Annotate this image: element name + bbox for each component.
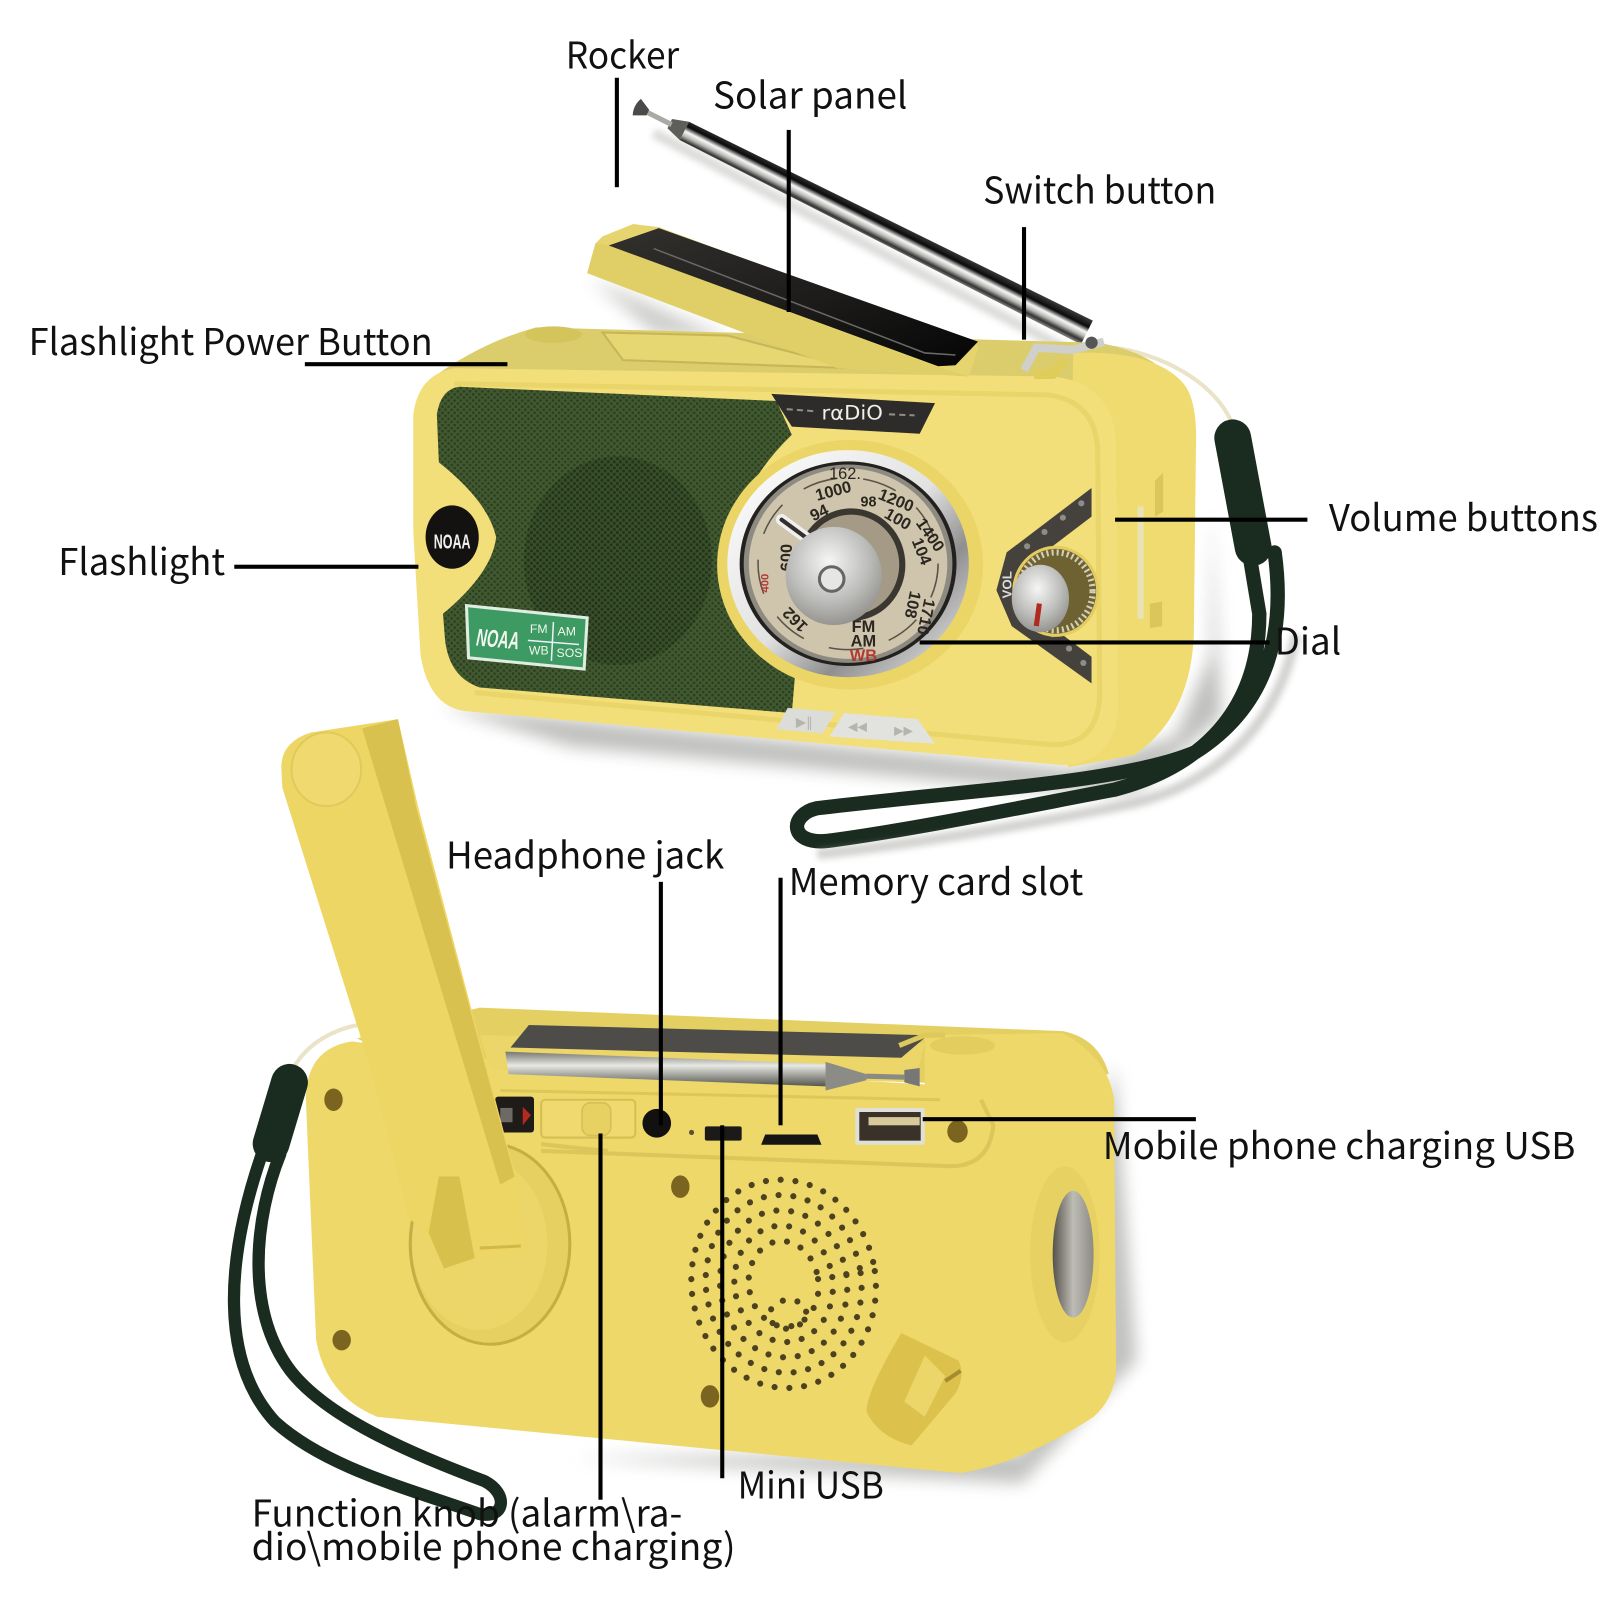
label: Solar panel: Solar panel	[713, 65, 907, 119]
dial numbers: 94	[807, 501, 832, 525]
dial numbers: 1710	[913, 597, 938, 637]
back shadow	[572, 1064, 1137, 1483]
label: Headphone jack	[446, 826, 724, 1125]
dial numbers: WB	[850, 647, 877, 665]
side slots	[1150, 473, 1163, 628]
dial scale arcs	[758, 478, 938, 650]
crank storage recess	[866, 1333, 962, 1446]
radio: front view	[413, 94, 1296, 854]
label: Headphone jack: Headphone jack	[446, 826, 724, 880]
speaker dark circle	[524, 456, 712, 665]
label: Mini USB: Mini USB	[738, 1456, 884, 1510]
back body top	[357, 1008, 1109, 1084]
dial inner chrome	[744, 464, 952, 663]
led pinhole	[689, 1130, 694, 1135]
label: Solar panel	[713, 65, 907, 312]
pointer	[782, 520, 812, 542]
dial inner dark edge	[740, 461, 957, 666]
dial numbers: 162.	[829, 465, 861, 483]
volume chevron plate	[996, 488, 1092, 683]
label: Rocker: Rocker	[566, 26, 680, 80]
antenna	[629, 94, 1093, 344]
lid edge	[899, 1035, 945, 1046]
raised frame	[454, 384, 1100, 745]
top surface	[429, 327, 1175, 384]
solar panel lid	[587, 224, 979, 376]
label: Memory card slot: Memory card slot	[789, 852, 1083, 906]
function indicator	[495, 1097, 534, 1132]
label: Mobile phone charging USB: Mobile phone charging USB	[1103, 1116, 1575, 1170]
port strip highlight	[500, 1091, 940, 1100]
playback buttons	[776, 708, 935, 744]
green label: NOAA	[475, 625, 520, 655]
label: Flashlight Power Button: Flashlight Power Button	[29, 312, 433, 366]
switch bracket	[1024, 337, 1104, 374]
playback buttons: ▶▶	[894, 724, 914, 738]
front face	[413, 368, 1118, 765]
dial	[717, 440, 983, 690]
dial numbers: 108	[901, 589, 924, 620]
flashlight	[1030, 1166, 1100, 1342]
rocker recess	[603, 332, 853, 368]
back cord	[291, 1023, 377, 1074]
playback buttons: ▶‖	[796, 715, 813, 730]
dial numbers: 400	[759, 574, 771, 593]
cord	[1114, 348, 1235, 430]
green label: SOS	[557, 646, 582, 660]
label: Rocker	[566, 26, 680, 187]
dial numbers: 104	[908, 536, 935, 568]
solar panel back	[510, 1025, 928, 1058]
tuning centre	[819, 567, 844, 591]
speaker perforations	[678, 1168, 889, 1400]
back wrist strap	[234, 1082, 501, 1515]
folding grip	[429, 1176, 475, 1269]
tuning dome	[786, 527, 882, 625]
dial numbers: FM	[852, 618, 875, 636]
back antenna	[505, 1052, 920, 1091]
label: Flashlight: Flashlight	[58, 532, 225, 586]
crank pivot disc	[292, 732, 361, 806]
dial face	[749, 469, 947, 659]
memory card slot	[761, 1135, 821, 1145]
green label	[466, 606, 587, 669]
solar lid shadow	[590, 278, 736, 343]
playback buttons: ◀◀	[848, 719, 868, 733]
back inner panel outline	[541, 1100, 993, 1166]
flashlight badge: NOAA	[434, 530, 471, 553]
label: Mini USB	[720, 1125, 884, 1510]
crank handle	[281, 719, 526, 1269]
dial numbers: 162	[779, 603, 811, 635]
dial numbers: 1000	[814, 478, 853, 505]
volume chevron plate: VOL	[1000, 571, 1015, 598]
label: Memory card slot	[779, 852, 1083, 1125]
headphone jack port	[642, 1109, 671, 1138]
label: Volume buttons: Volume buttons	[1329, 488, 1598, 542]
strap shadow	[817, 634, 1296, 854]
label: Function knob: dio\mobile phone charging)	[252, 1517, 736, 1571]
antenna shadow	[654, 133, 1063, 348]
side text strip	[1138, 506, 1144, 619]
dial numbers: AM	[851, 633, 876, 651]
radio nameplate	[771, 394, 935, 434]
mini USB port	[705, 1126, 742, 1141]
green label: FM	[530, 622, 548, 636]
label: Dial: Dial	[1275, 612, 1341, 666]
label: Volume buttons	[1115, 488, 1598, 542]
radio nameplate: rαDiO	[821, 401, 883, 424]
flashlight power button	[525, 326, 582, 343]
side face	[1068, 353, 1196, 767]
dial numbers: 1400	[912, 515, 948, 555]
label: Switch button: Switch button	[983, 161, 1216, 215]
speaker grille	[437, 387, 795, 713]
dial surround	[717, 440, 983, 690]
crank wheel	[410, 1144, 570, 1344]
volume knob	[1012, 547, 1098, 635]
dial numbers: 100	[881, 505, 914, 534]
back body	[306, 1033, 1116, 1473]
dial numbers: 600	[778, 544, 796, 571]
back top recess	[480, 1035, 925, 1082]
label: Switch button	[983, 161, 1216, 340]
radio: back view	[234, 719, 1137, 1515]
label: Function knob: Function knob (alarm\ra-	[252, 1483, 682, 1537]
label: Flashlight	[58, 532, 418, 586]
function knob	[541, 1100, 635, 1138]
wrist strap	[797, 438, 1278, 841]
tuning hub	[800, 512, 902, 618]
USB port	[855, 1108, 925, 1145]
dial numbers	[759, 465, 948, 665]
screw holes	[324, 1088, 968, 1408]
label: Function knob	[252, 1133, 736, 1571]
shadow under front radio	[439, 512, 1221, 793]
chrome ring	[727, 450, 969, 677]
rocker cap	[930, 1036, 995, 1055]
solar cell	[609, 228, 978, 366]
dial numbers: 1200	[876, 486, 916, 516]
green label: AM	[558, 624, 576, 638]
flashlight badge	[426, 505, 479, 569]
green label: WB	[529, 644, 549, 658]
dial numbers: 98	[861, 494, 877, 510]
label: Dial	[920, 612, 1341, 666]
